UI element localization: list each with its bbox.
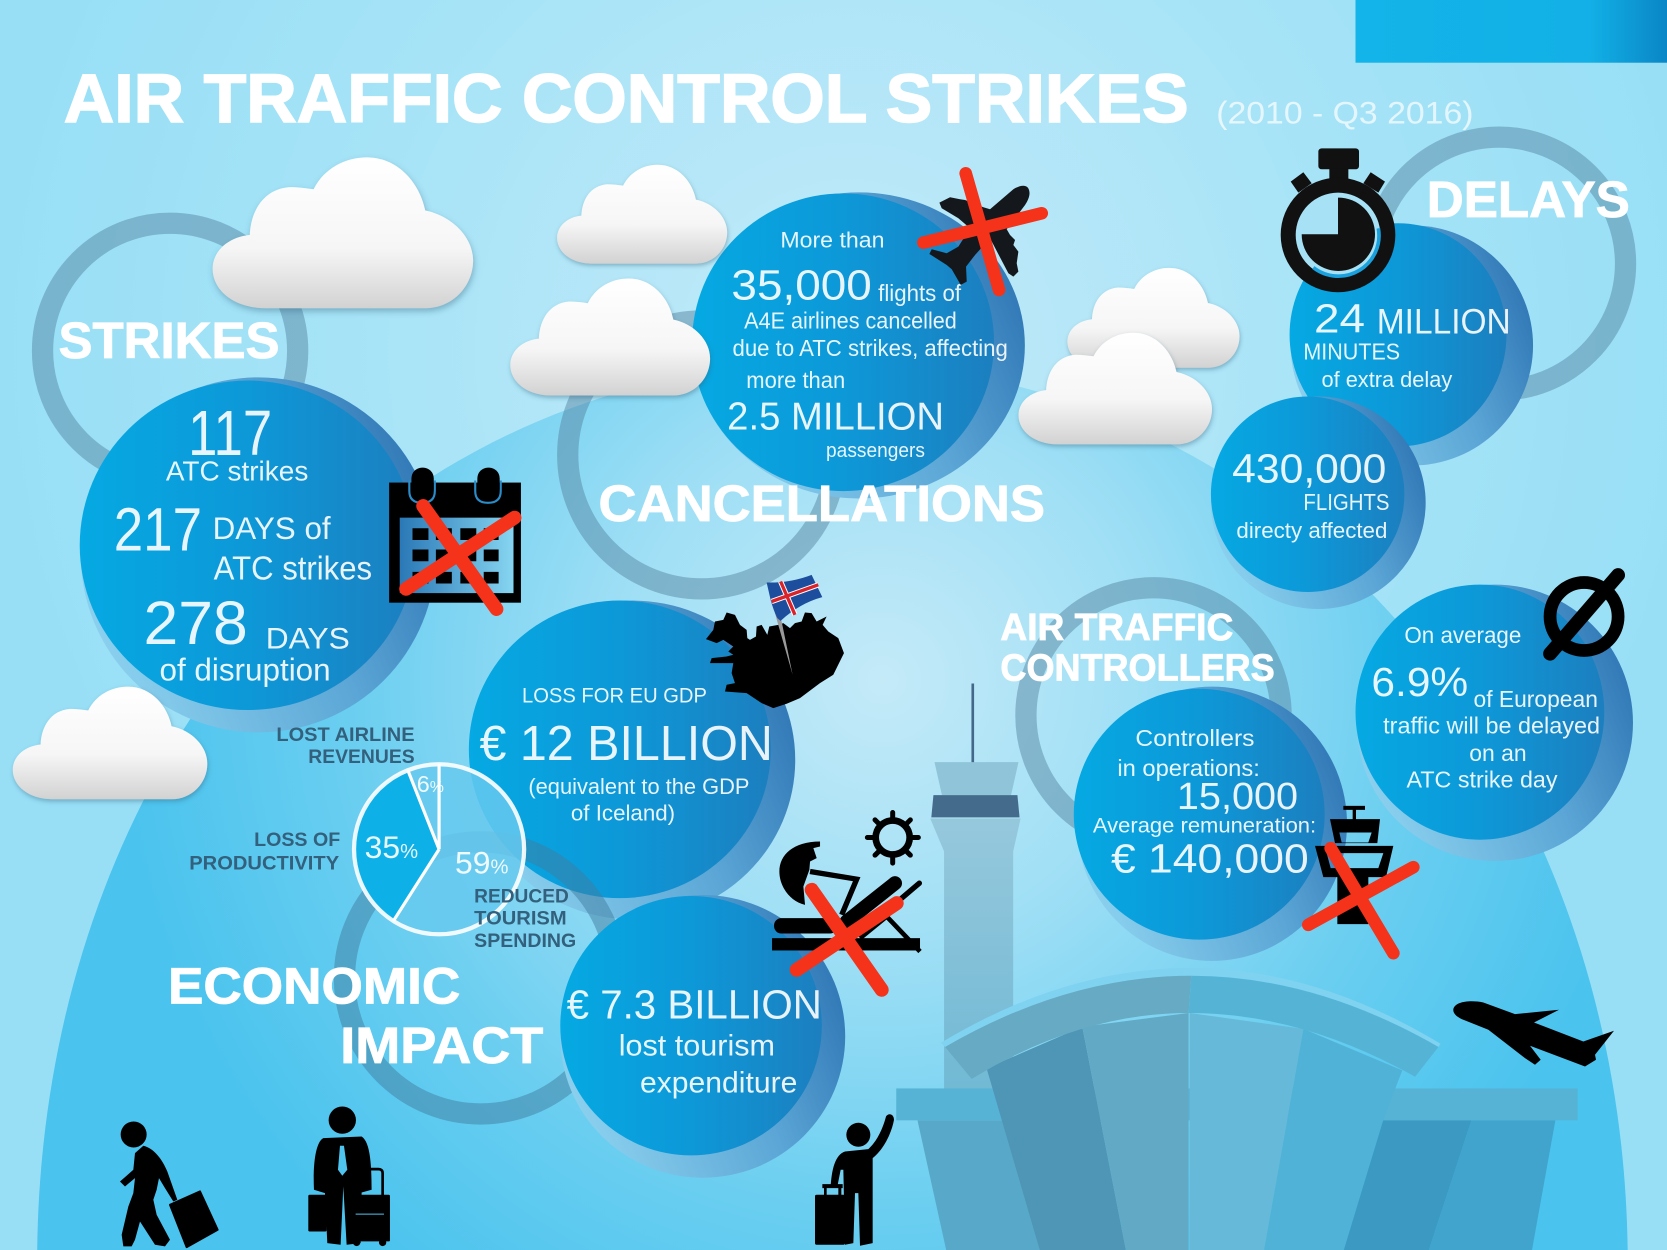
stat: 12 billion: LOSS FOR EU GDP — [522, 684, 707, 708]
stat: 12 billion: of Iceland) — [571, 801, 675, 826]
stat: 278 days of disruption: 278 — [144, 589, 248, 658]
text: cancelled flights: 2.5 MILLION — [727, 394, 944, 438]
cloud: right back — [1067, 268, 1240, 368]
stat: controllers and remuneration: 15,000 — [1177, 775, 1298, 818]
pie value labels: 6% — [417, 771, 444, 797]
icon: stopwatch — [1281, 148, 1395, 292]
stat: controllers and remuneration: in operations: — [1117, 755, 1260, 781]
pie category labels: LOST AIRLINE — [276, 725, 415, 746]
pie category labels: PRODUCTIVITY — [189, 853, 339, 874]
stat: 217 days of ATC strikes: 217 — [114, 496, 202, 565]
stat: 6.9 percent: on an — [1469, 740, 1527, 766]
panel: flights affected — [1211, 396, 1426, 609]
heading: cancellations: CANCELLATIONS — [599, 475, 1045, 532]
heading: strikes: STRIKES — [58, 312, 280, 369]
stat: 7.3 billion: € 7.3 BILLION — [567, 981, 822, 1027]
stat: 217 days of ATC strikes — [114, 496, 372, 586]
pie category labels: LOSS OF — [254, 830, 340, 851]
pie category labels: REVENUES — [308, 747, 415, 768]
cloud: top left — [213, 157, 473, 308]
heading: air traffic controllers: CONTROLLERS — [1000, 646, 1275, 689]
stat: 7.3 billion: expenditure — [640, 1067, 797, 1100]
icon: average symbol — [1550, 575, 1618, 654]
pie value labels: 35% — [365, 829, 418, 865]
panel: strikes — [43, 223, 521, 732]
stat: 278 days of disruption: DAYS — [266, 622, 350, 655]
stat: 24 million minutes: of extra delay — [1321, 367, 1453, 392]
stat: controllers and remuneration: Average remuneration: — [1093, 813, 1316, 837]
panel: air traffic controllers — [1000, 588, 1413, 961]
panel: average delay — [1356, 575, 1633, 861]
icon: crossed tower — [1308, 806, 1413, 953]
stat: controllers and remuneration — [1093, 725, 1316, 882]
stat: 217 days of ATC strikes: DAYS of — [213, 510, 331, 546]
stat: 430,000 flights: FLIGHTS — [1303, 489, 1390, 515]
stat: 217 days of ATC strikes: ATC strikes — [214, 549, 372, 586]
subtitle: date range: (2010 - Q3 2016) — [1216, 94, 1474, 130]
heading: air traffic controllers — [1000, 606, 1275, 689]
stat: 12 billion — [479, 684, 773, 826]
icon: crossed beach chair and sun — [772, 813, 920, 990]
stat: 117 ATC strikes — [166, 397, 308, 486]
heading: economic impact: ECONOMIC — [168, 957, 460, 1014]
panel: lost tourism — [560, 813, 920, 1178]
stat: 117 ATC strikes: 117 — [188, 397, 272, 469]
stat: 6.9 percent: 6.9% — [1371, 659, 1468, 705]
stat: 6.9 percent: On average — [1404, 622, 1521, 648]
panel: delays — [1281, 137, 1630, 466]
stat: 12 billion: € 12 BILLION — [479, 717, 773, 771]
pie category labels: REDUCED — [474, 886, 569, 907]
stat: 6.9 percent: traffic will be delayed — [1383, 712, 1600, 738]
text: cancelled flights — [727, 228, 1008, 462]
icon: crossed plane — [923, 173, 1042, 290]
stat: controllers and remuneration: € 140,000 — [1111, 836, 1309, 882]
stat: 7.3 billion — [567, 981, 822, 1100]
stat: 278 days of disruption — [144, 589, 350, 687]
text: cancelled flights: passengers — [826, 440, 925, 462]
stat: 24 million minutes: 24 — [1314, 296, 1365, 342]
icon: crossed calendar — [389, 468, 521, 609]
pie category labels — [189, 725, 576, 952]
panel: cancellations — [568, 173, 1045, 589]
pie category labels: SPENDING — [474, 931, 576, 952]
stat: 6.9 percent — [1371, 622, 1600, 793]
heading: delays: DELAYS — [1427, 171, 1630, 228]
pie category labels: TOURISM — [474, 909, 567, 930]
pie value labels: 59% — [455, 845, 508, 881]
stat: 430,000 flights: directy affected — [1236, 518, 1387, 543]
stat: 117 ATC strikes: ATC strikes — [166, 455, 308, 486]
icon: waving passenger with suitcase — [815, 1114, 894, 1246]
panel: loss for EU GDP — [469, 575, 844, 919]
stat: 24 million minutes: MILLION — [1377, 303, 1511, 342]
pie value labels — [365, 771, 508, 881]
cloud: top centre — [557, 165, 727, 264]
stat: 6.9 percent: of European — [1474, 686, 1598, 712]
stat: 24 million minutes — [1303, 296, 1511, 392]
text: cancelled flights: 35,000 — [731, 263, 872, 310]
heading: economic impact: IMPACT — [340, 1017, 543, 1074]
icon: iceland map with flag — [706, 575, 844, 708]
stat: 430,000 flights — [1232, 446, 1390, 543]
cloud: right front — [1018, 333, 1212, 444]
stat: 24 million minutes: MINUTES — [1303, 338, 1400, 364]
stat: 278 days of disruption: of disruption — [159, 651, 331, 687]
icon: departing plane — [1453, 1001, 1614, 1066]
text: cancelled flights: A4E airlines cancelled — [744, 307, 957, 333]
stat: 430,000 flights: 430,000 — [1232, 446, 1386, 492]
dome backdrop — [37, 361, 1628, 1250]
heading: air traffic controllers: AIR TRAFFIC — [1000, 606, 1233, 649]
stat: 12 billion: (equivalent to the GDP — [528, 774, 750, 799]
control tower and terminal illustration — [896, 683, 1578, 1250]
panel: economic impact — [168, 725, 617, 1114]
cloud: centre — [510, 278, 710, 395]
cloud: lower left — [13, 687, 207, 799]
corner tab — [1356, 0, 1667, 63]
icon: businessman with luggage — [308, 1106, 390, 1246]
text: cancelled flights: more than — [746, 367, 845, 393]
stat: 7.3 billion: lost tourism — [619, 1029, 775, 1062]
text: cancelled flights: due to ATC strikes, affecting — [733, 335, 1008, 361]
title: AIR TRAFFIC CONTROL STRIKES — [64, 59, 1189, 137]
text: cancelled flights: flights of — [878, 280, 962, 306]
pie chart — [354, 764, 524, 934]
text: cancelled flights: More than — [780, 228, 885, 253]
heading: economic impact — [168, 957, 543, 1074]
stat: 6.9 percent: ATC strike day — [1407, 767, 1558, 793]
icon: walking passenger with suitcase — [120, 1121, 218, 1247]
stat: controllers and remuneration: Controllers — [1135, 725, 1255, 751]
